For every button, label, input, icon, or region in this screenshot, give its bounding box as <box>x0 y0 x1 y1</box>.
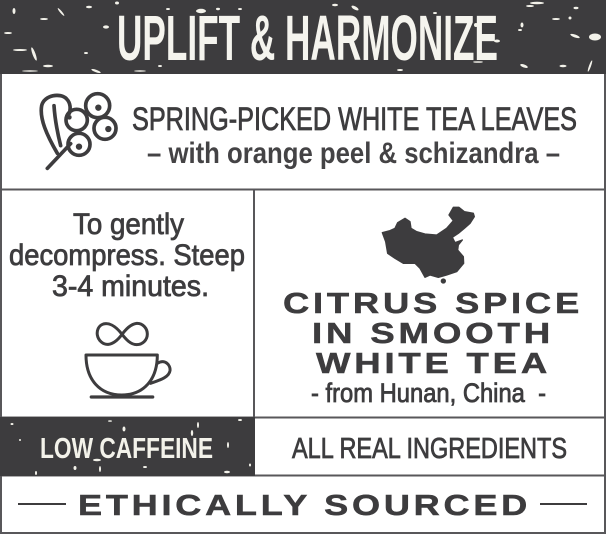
text block: steeping instructions <box>9 208 245 303</box>
text block: steeping instructions: 3-4 minutes. <box>52 270 209 303</box>
heading: flavor description <box>283 288 583 380</box>
icon: teacup with infinity steam <box>86 323 170 397</box>
icon: berries and leaf <box>41 94 116 168</box>
heading: flavor description: IN SMOOTH <box>312 318 554 350</box>
heading: flavor description: WHITE TEA <box>316 348 551 380</box>
panel: low caffeine badge <box>0 417 255 476</box>
text block: steeping instructions: decompress. Steep <box>9 239 245 272</box>
text block: origin: - from Hunan, China - <box>311 378 546 408</box>
footer: ethically sourced: ETHICALLY SOURCED <box>78 490 531 522</box>
label: low caffeine: LOW CAFFEINE <box>40 433 213 465</box>
icon: map of China <box>382 207 474 283</box>
heading: flavor description: CITRUS SPICE <box>283 288 583 320</box>
panel: title banner <box>0 0 606 74</box>
text block: steeping instructions: To gently <box>73 208 184 241</box>
